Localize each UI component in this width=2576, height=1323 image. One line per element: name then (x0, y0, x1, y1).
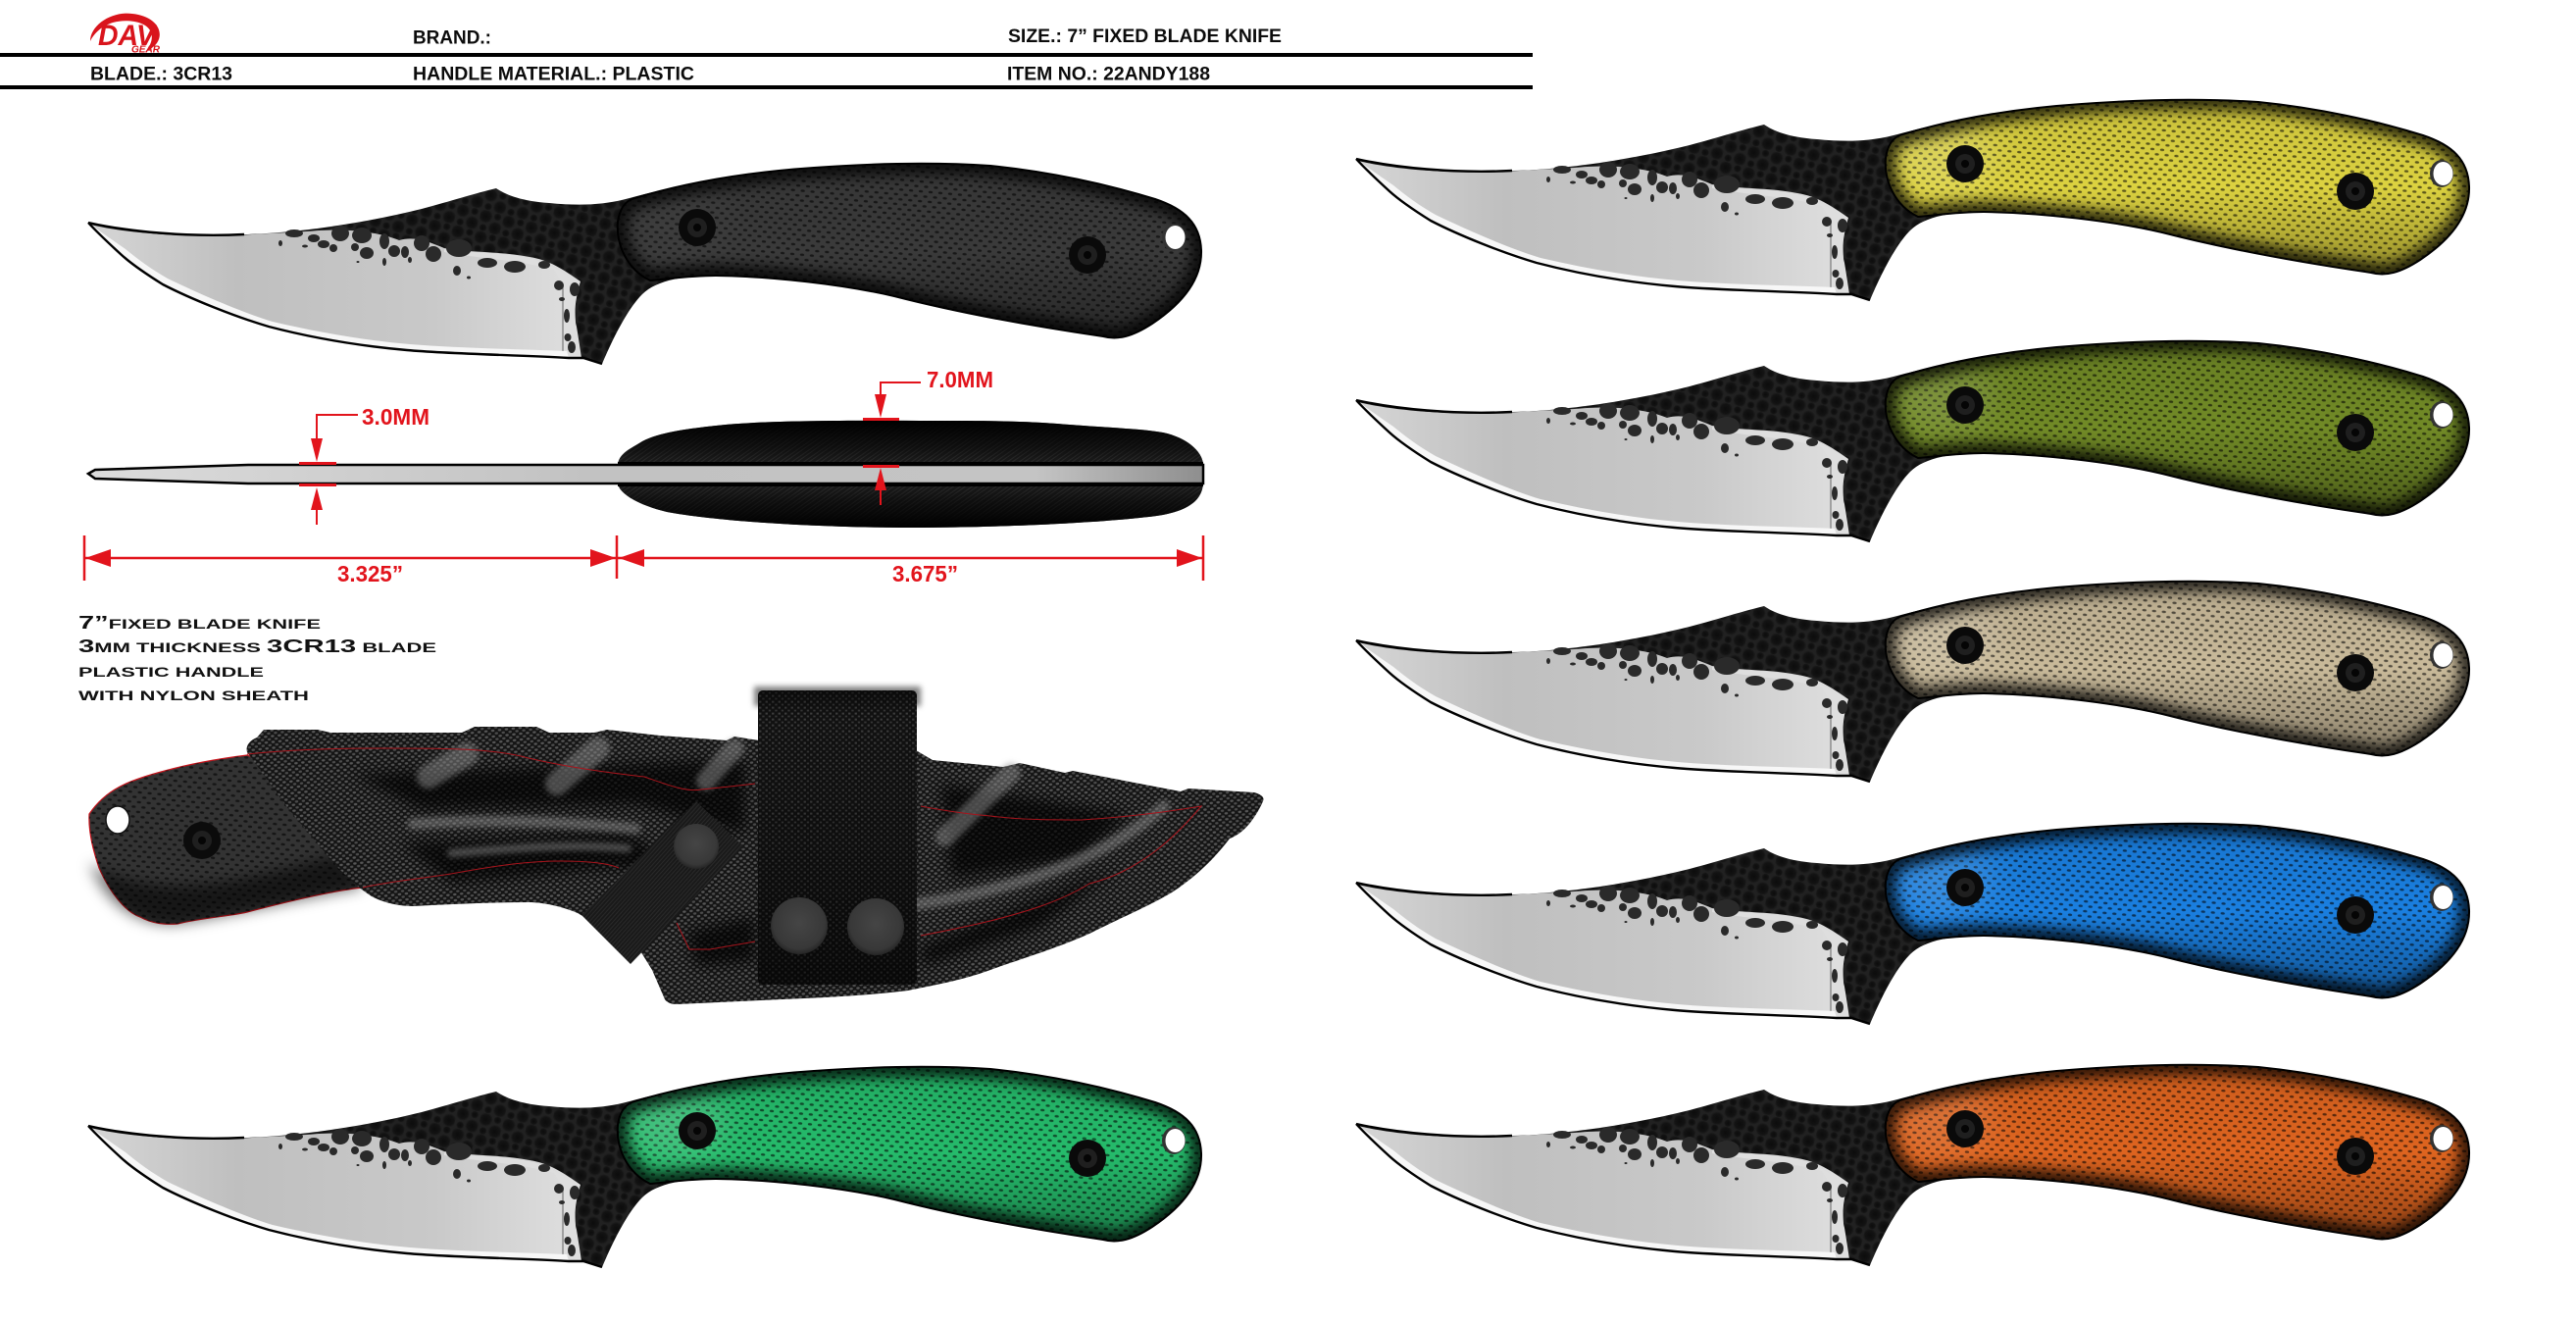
small retention strap (581, 801, 743, 964)
knife screws and lanyard hole (1946, 1110, 2453, 1175)
spine view blade strip (88, 465, 1203, 483)
knife handle (1881, 334, 2479, 521)
knife blade (1356, 824, 2469, 1024)
knife screws and lanyard hole (1946, 145, 2453, 210)
header row 2 text: ITEM NO.: 22ANDY188 (1007, 65, 1210, 84)
header row 2 text (90, 65, 1210, 84)
knife handle (1881, 1058, 2479, 1245)
sheath with knife (89, 687, 1264, 1004)
knife screws and lanyard hole (679, 209, 1186, 274)
sheath red stitching (247, 748, 1201, 949)
dimension: 3.675 handle length (618, 535, 1203, 586)
header divider lines (0, 53, 1533, 89)
knife blade (1356, 1065, 2469, 1265)
dimension: 3.325 blade length: 3.325” (337, 561, 403, 586)
header row 2 text: HANDLE MATERIAL.: PLASTIC (413, 65, 694, 84)
knife screws and lanyard hole (1946, 869, 2453, 934)
logo: DAV Gear: GEAR (131, 43, 160, 55)
dimension: 3.0MM blade thickness: 3.0MM (362, 404, 429, 430)
knife: yellow handle (1356, 93, 2479, 300)
knife handle (613, 157, 1211, 343)
product description text: 3 MM THICKNESS 3CR13 BLADE (78, 636, 436, 656)
sheath body (247, 727, 1264, 1004)
knife handle (1881, 93, 2479, 280)
header row 1 text: SIZE.: 7” FIXED BLADE KNIFE (1008, 26, 1282, 47)
knife: tan handle (1356, 575, 2479, 782)
knife screws and lanyard hole (679, 1112, 1186, 1177)
header row 2 text: BLADE.: 3CR13 (90, 65, 232, 84)
sheath dark recesses (353, 760, 1128, 966)
knife: orange handle (1356, 1058, 2479, 1265)
spine view of knife (88, 421, 1203, 528)
knife: green handle (88, 1060, 1211, 1267)
product description text: WITH NYLON SHEATH (78, 688, 309, 703)
knife handle (613, 1060, 1211, 1247)
knife blade (1356, 582, 2469, 782)
header (0, 14, 1533, 89)
knife: black handle, side profile (88, 157, 1211, 364)
spine view handle (618, 421, 1203, 528)
product description text: 7” FIXED BLADE KNIFE (78, 613, 321, 633)
knife blade (88, 164, 1201, 364)
sheath molded ridges (413, 748, 1164, 904)
knife: olive handle (1356, 334, 2479, 541)
product description text (78, 613, 436, 703)
dimension: 3.325 blade length (84, 535, 617, 586)
logo: DAV Gear: DAV (98, 20, 158, 52)
header row 1 text (413, 26, 1282, 49)
knife handle (1881, 817, 2479, 1003)
knife screws and lanyard hole (1946, 386, 2453, 451)
dimension: 3.675 handle length: 3.675” (892, 561, 958, 586)
knife blade (1356, 100, 2469, 300)
dimension: 7.0MM handle thickness: 7.0MM (927, 367, 993, 392)
header row 1 text: BRAND.: (413, 27, 491, 49)
knife blade (88, 1067, 1201, 1267)
knife: blue handle (1356, 817, 2479, 1024)
belt loop strap (754, 687, 921, 985)
knife screws and lanyard hole (1946, 627, 2453, 691)
logo: DAV Gear (90, 14, 160, 55)
dimension: 7.0MM handle thickness (863, 367, 993, 505)
knife blade (1356, 341, 2469, 541)
sheathed knife handle (89, 755, 363, 924)
product description text: PLASTIC HANDLE (78, 665, 264, 680)
knife handle (1881, 575, 2479, 761)
dimension: 3.0MM blade thickness (299, 404, 429, 525)
